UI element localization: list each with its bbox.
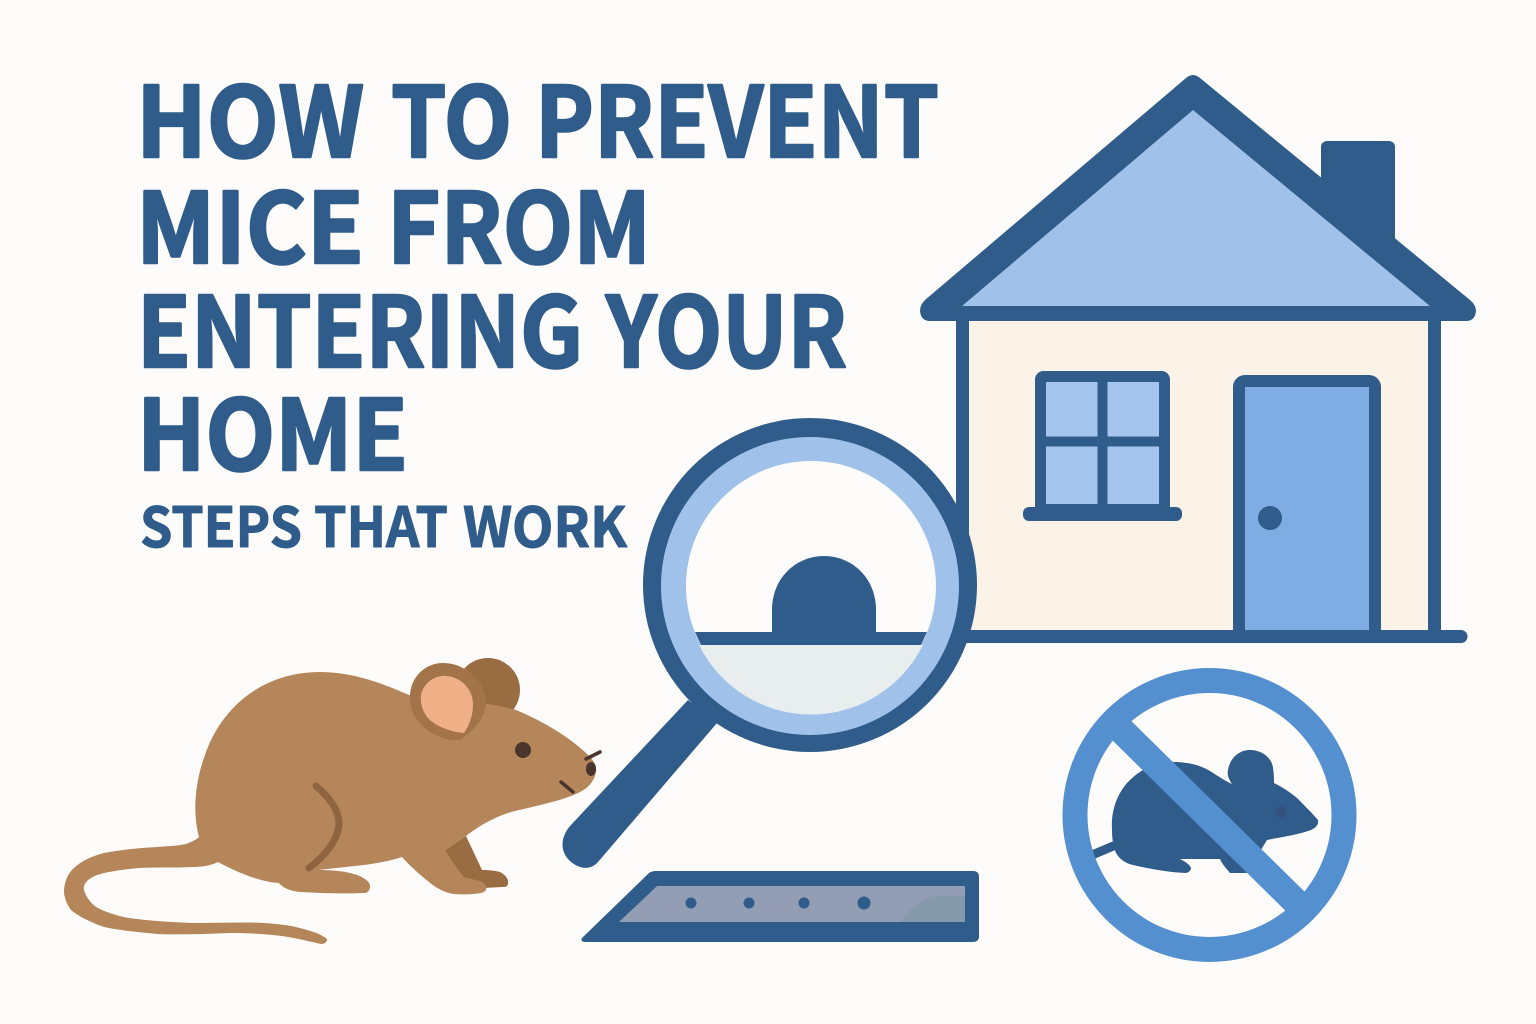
whiskers	[561, 752, 600, 792]
floor	[699, 645, 923, 714]
nose	[586, 762, 596, 776]
baseboard strip with holes	[582, 871, 979, 942]
title: ENTERING	[137, 254, 583, 395]
lens ring	[661, 437, 959, 735]
magnifying glass	[562, 418, 977, 868]
title: PREVENT	[535, 44, 939, 185]
lens interior	[686, 461, 936, 711]
prohibition bar	[1112, 721, 1304, 910]
ground line	[962, 630, 1461, 643]
screw holes	[686, 896, 870, 910]
body and tail	[64, 672, 596, 944]
title: YOUR	[605, 254, 847, 395]
handle	[562, 700, 717, 868]
subtitle: WORK	[463, 483, 627, 563]
title: HOME	[137, 357, 408, 498]
baseboard	[695, 632, 927, 645]
title: FROM	[387, 150, 651, 291]
haunch line	[309, 786, 339, 868]
house wall	[962, 315, 1435, 636]
far ear	[456, 658, 520, 722]
subtitle: THAT	[314, 483, 448, 563]
subtitle	[140, 483, 627, 563]
chimney	[1321, 141, 1395, 260]
far leg	[445, 836, 508, 889]
prohibition ring	[1075, 680, 1344, 950]
title: TO	[391, 44, 512, 185]
near ear	[410, 663, 486, 740]
inner ear	[421, 676, 473, 733]
title: HOW	[136, 44, 364, 185]
mouse hole	[772, 556, 876, 640]
house illustration	[920, 75, 1476, 636]
strip face	[619, 886, 965, 922]
small mouse tail	[1085, 844, 1118, 858]
small mouse silhouette	[1112, 750, 1318, 873]
window	[1023, 376, 1182, 521]
wall outlines	[962, 315, 1434, 636]
title: MICE	[136, 150, 364, 291]
strip frame	[582, 871, 979, 942]
lens frame	[643, 418, 977, 752]
subtitle: STEPS	[140, 483, 302, 563]
small mouse eye	[1276, 806, 1286, 818]
roof	[920, 75, 1476, 321]
eye	[515, 742, 531, 758]
strip shading	[900, 896, 965, 922]
mouse	[64, 658, 600, 944]
door	[1239, 381, 1375, 632]
no mice symbol	[1075, 680, 1344, 950]
title	[136, 44, 939, 498]
